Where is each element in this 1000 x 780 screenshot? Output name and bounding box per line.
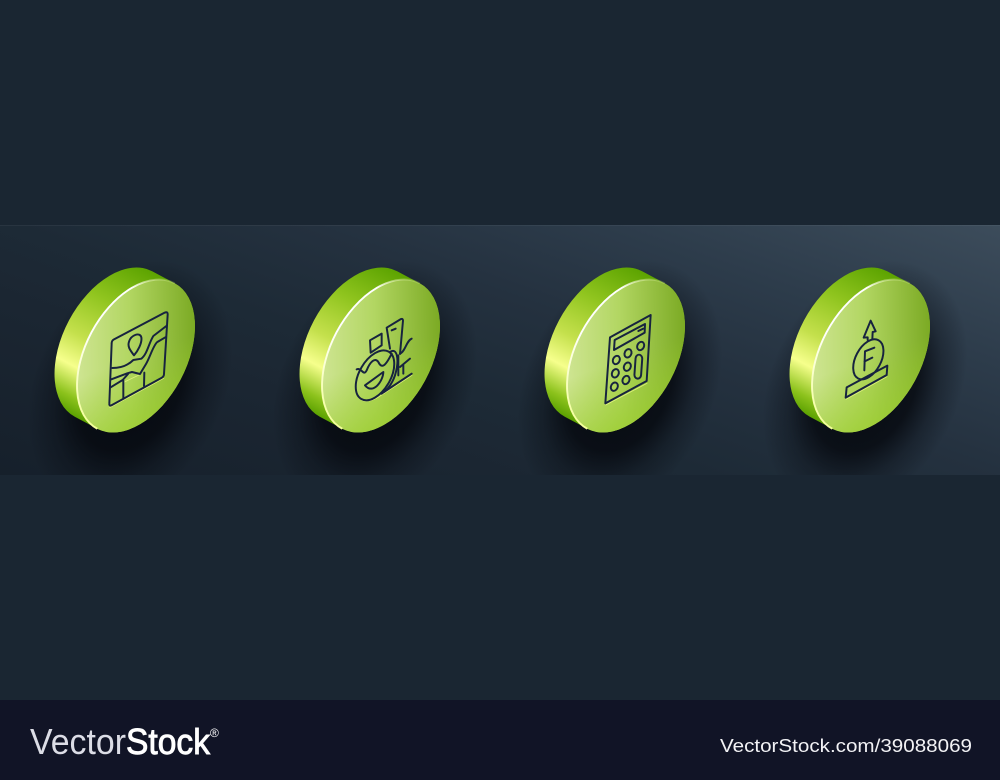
button: nature and mobile xyxy=(233,226,517,546)
image id: VectorStock.com/39088069 xyxy=(720,736,972,756)
icon: globe with phone and plant xyxy=(348,319,412,407)
logo: VectorStock: Stock xyxy=(126,721,211,762)
logo: VectorStock: Vector xyxy=(30,721,126,762)
icon: calculator xyxy=(605,315,651,405)
icon: coin F with up arrow xyxy=(846,321,890,399)
button: calculator xyxy=(478,226,762,546)
icon: map with pin xyxy=(109,312,168,408)
lit background band xyxy=(0,225,1000,475)
logo: VectorStock xyxy=(30,721,219,762)
button: inflation xyxy=(723,226,1000,546)
footer bar xyxy=(0,700,1000,780)
logo: VectorStock: ® xyxy=(210,726,219,740)
button: map xyxy=(0,226,272,546)
